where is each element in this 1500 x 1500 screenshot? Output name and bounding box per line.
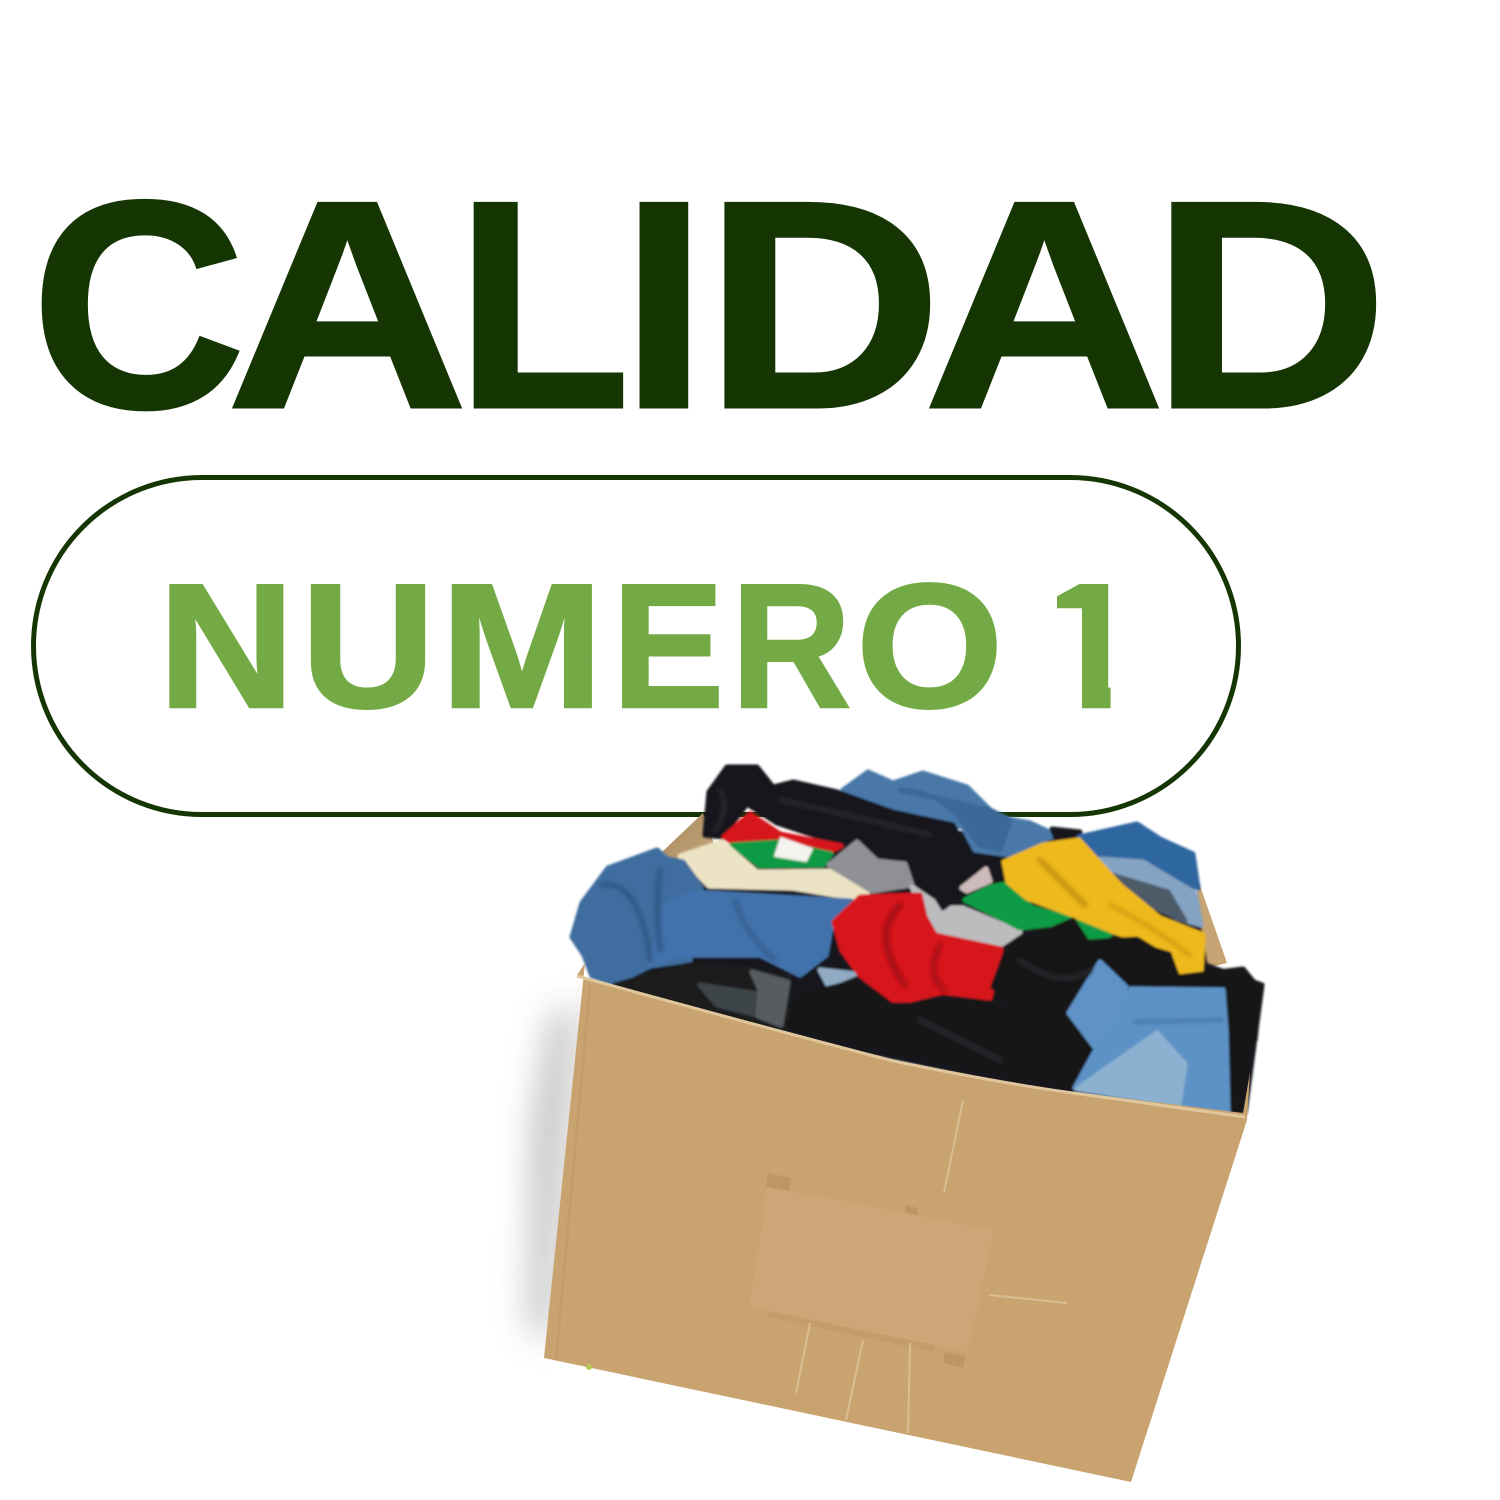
white tag bbox=[775, 838, 812, 861]
left denim jacket bbox=[572, 850, 701, 984]
folded light denim bbox=[1100, 859, 1201, 925]
box of clothes bbox=[544, 767, 1262, 1482]
red shirt bbox=[834, 895, 1001, 1000]
title: CALIDAD: A bbox=[923, 139, 1166, 470]
dark base layer bbox=[610, 830, 1262, 1112]
subtitle: NUMERO 1: U bbox=[301, 547, 435, 745]
patterned grey cloth bbox=[912, 887, 1020, 944]
title: CALIDAD: L bbox=[456, 139, 630, 470]
tape marks bbox=[766, 1173, 966, 1368]
title: CALIDAD: D bbox=[1151, 139, 1388, 470]
clothes pile bbox=[572, 767, 1262, 1112]
black right garment bbox=[993, 920, 1260, 1111]
small speck bbox=[586, 1364, 592, 1370]
subtitle: NUMERO 1: N bbox=[158, 547, 294, 745]
subtitle: NUMERO 1: 1 bbox=[1030, 547, 1145, 745]
subtitle: NUMERO 1: O bbox=[856, 547, 1004, 745]
main jeans bbox=[1075, 989, 1228, 1111]
box front face bbox=[544, 963, 1250, 1482]
black lump behind denim bbox=[1052, 829, 1080, 838]
box corner crease bbox=[556, 985, 590, 1360]
yellow shirt bbox=[1004, 840, 1203, 975]
denim dark streak bbox=[1112, 875, 1185, 921]
box texture bbox=[544, 975, 1247, 1482]
corrugation lines bbox=[796, 1100, 1067, 1433]
title: CALIDAD bbox=[31, 139, 1388, 470]
box shadow bbox=[530, 1005, 576, 1340]
subtitle: NUMERO 1: R bbox=[731, 547, 851, 745]
title: CALIDAD: C bbox=[31, 139, 246, 470]
red collar bbox=[724, 814, 841, 850]
small black cloth bbox=[932, 890, 963, 908]
black lower garment bbox=[789, 982, 1091, 1085]
green shirt bbox=[732, 842, 831, 866]
box inner back flaps bbox=[662, 813, 1227, 972]
denim sleeve bbox=[650, 892, 853, 975]
clothing fold details bbox=[602, 790, 1222, 1060]
grey knit bbox=[700, 985, 758, 1015]
dark knit bbox=[615, 965, 790, 1028]
back denim bbox=[843, 772, 1056, 855]
blank label bbox=[749, 1187, 994, 1352]
title: CALIDAD: A bbox=[226, 139, 469, 470]
box top rim bbox=[577, 976, 1245, 1117]
right denim bbox=[1079, 824, 1198, 888]
back denim seam bbox=[900, 790, 1010, 850]
title: CALIDAD: D bbox=[704, 139, 942, 470]
black shirt top bbox=[705, 767, 975, 888]
pill outline bbox=[34, 478, 1238, 814]
grey shirt bbox=[829, 842, 912, 891]
jeans pocket bbox=[1077, 1033, 1185, 1105]
patterned sliver bbox=[820, 970, 855, 985]
subtitle: NUMERO 1: E bbox=[612, 547, 724, 745]
subtitle: NUMERO 1: M bbox=[440, 547, 604, 745]
lighter knit bbox=[752, 972, 788, 1025]
green sleeve bbox=[965, 882, 1110, 940]
small jeans bbox=[1069, 962, 1126, 1050]
pink cloth bbox=[962, 869, 990, 891]
cream shirt bbox=[680, 842, 868, 898]
title: CALIDAD: I bbox=[620, 139, 708, 470]
subtitle: NUMERO 1 bbox=[158, 547, 1111, 745]
